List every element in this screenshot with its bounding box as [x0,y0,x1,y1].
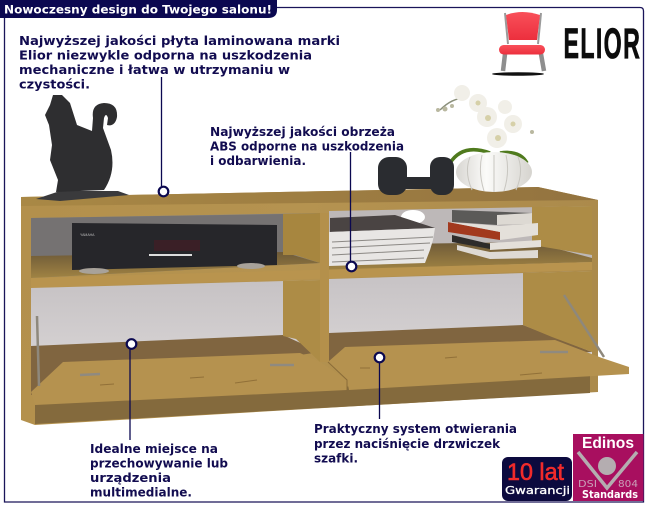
upper left compartment [31,213,320,278]
badge: Edinos standards: Edinos [582,435,634,452]
right flap door [328,340,629,390]
title banner: Nowoczesny design do Twojego salonu! [4,2,272,16]
door seam [328,362,347,390]
text block: laminated board: Elior niezwykle odporna na uszkodzenia [19,48,312,62]
text block: opening system [314,421,517,466]
icon: vase [456,152,532,192]
badge: Edinos standards: 804 [618,479,638,490]
furniture: TV cabinet [21,187,629,425]
text block: storage: multimedialne. [90,484,192,500]
text block: storage: przechowywanie lub [90,456,228,470]
icon: chair logo [492,12,545,76]
left flap door [31,353,347,405]
text block: opening system: szafki. [314,450,358,466]
right stack of books [448,210,541,259]
text block: ABS edging [210,124,404,168]
shelf front [31,262,592,288]
badge: 10 year warranty: Gwarancji [505,484,570,497]
badge: Edinos standards: DSI [578,479,597,490]
icon: cat figurine [36,95,129,201]
text block: opening system: Praktyczny system otwierania [314,421,517,436]
lower right compartment [329,271,592,362]
badge: Edinos standards: Standards [582,489,638,501]
text block: ABS edging: ABS odporne na uszkodzenia [210,138,404,154]
divider [320,213,329,362]
text block: storage [90,441,228,500]
callout: board line and marker [159,77,168,196]
text block: laminated board: czystości. [19,76,90,92]
door hinges [80,352,568,375]
icon: orchid [436,85,534,163]
upper right compartment [329,206,592,270]
badge: 10 year warranty: 10 lat [507,459,564,486]
text block: storage: urządzenia [90,470,171,485]
text block: ABS edging: Najwyższej jakości obrzeża [210,124,395,139]
left stack of books [329,215,435,266]
callout: door line and marker [375,353,384,419]
text block: laminated board [19,33,340,92]
media player: YAMAHA [80,233,95,237]
plinth [35,376,590,424]
icon: dumbbell [378,157,454,195]
text block: ABS edging: i odbarwienia. [210,153,306,168]
cabinet body [21,187,598,425]
cabinet top surface [21,187,598,206]
lower left compartment [31,280,320,395]
badge: 10 year warranty [502,457,572,501]
text block: laminated board: mechaniczne i łatwa w utrzymaniu w [19,62,290,77]
hinge arms [37,295,604,386]
text block: storage: Idealne miejsce na [90,441,218,456]
white gap behind books [401,210,425,224]
callout: edge line and marker [347,152,356,271]
text block: opening system: przez naciśnięcie drzwiczek [314,436,501,451]
media player [72,223,277,274]
callout: storage line and marker [127,339,136,440]
badge: Edinos standards [573,434,644,501]
text block: laminated board: Najwyższej jakości płyta laminowana marki [19,33,340,48]
brand name: ELIOR [564,21,641,68]
wood grain marks [100,357,542,385]
